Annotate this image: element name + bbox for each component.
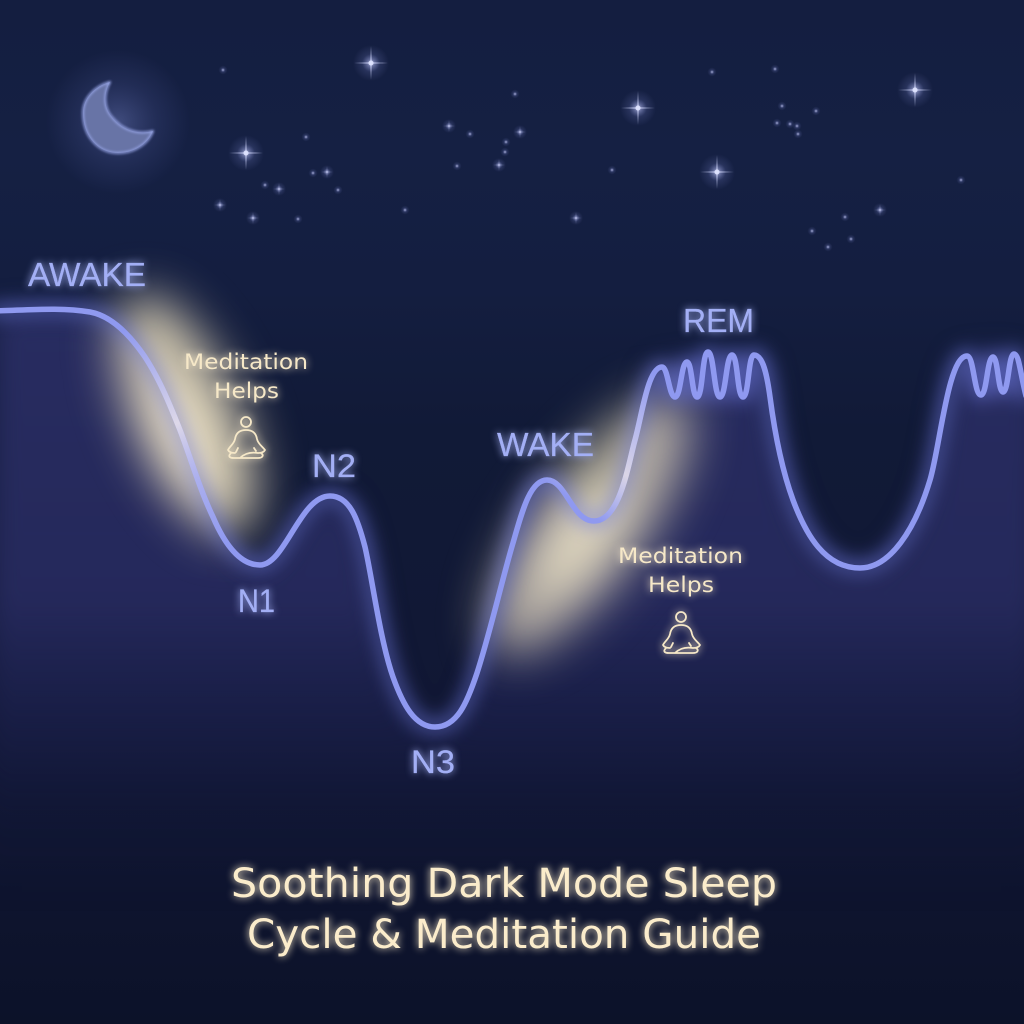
callout: Meditation Helps, right: Helps bbox=[648, 573, 714, 597]
icon: crescent moon bbox=[46, 50, 190, 194]
background: violet area under the curve bbox=[0, 309, 1024, 1024]
icon: meditating figure, left bbox=[228, 417, 265, 458]
title: Cycle & Meditation Guide bbox=[247, 912, 761, 958]
title: Soothing Dark Mode Sleep bbox=[231, 861, 777, 907]
label: WAKE: WAKE bbox=[497, 426, 594, 463]
callout: Meditation Helps, left bbox=[184, 350, 308, 403]
label: AWAKE: AWAKE bbox=[28, 256, 146, 293]
label: REM: REM bbox=[683, 302, 754, 339]
callout: Meditation Helps, left: Meditation bbox=[184, 350, 308, 374]
icon: meditating figure, right bbox=[663, 612, 700, 653]
callout: Meditation Helps, right: Meditation bbox=[618, 544, 743, 568]
label: N2: N2 bbox=[312, 448, 356, 484]
callout: Meditation Helps, left: Helps bbox=[214, 379, 279, 403]
label: N3: N3 bbox=[411, 744, 455, 780]
title bbox=[231, 861, 777, 958]
meditation highlight: returning to sleep bbox=[455, 368, 725, 682]
sleep cycle curve bbox=[0, 309, 1024, 727]
label: N1: N1 bbox=[238, 583, 275, 619]
meditation highlight: falling asleep bbox=[86, 275, 286, 555]
callout: Meditation Helps, right bbox=[618, 544, 743, 597]
starfield bbox=[213, 45, 966, 252]
